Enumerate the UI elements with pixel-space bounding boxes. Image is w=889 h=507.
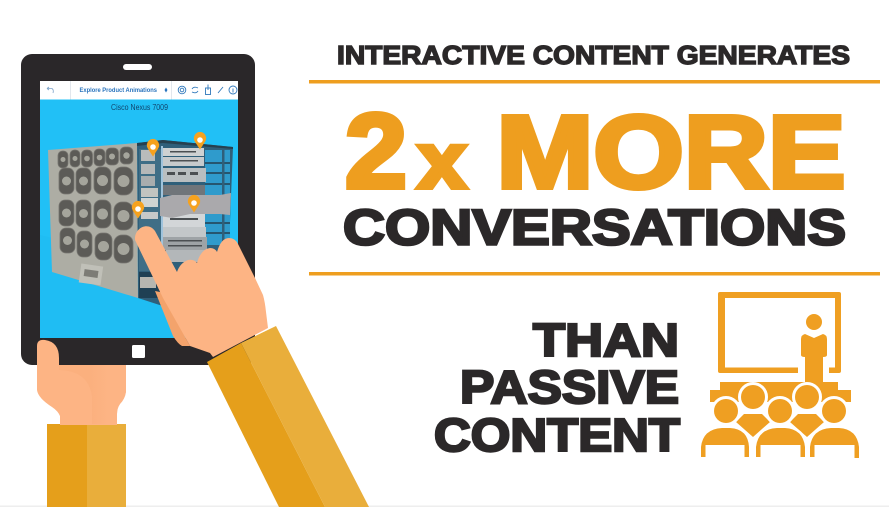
icon: presenter and audience	[701, 292, 859, 458]
toolbar	[40, 81, 238, 100]
speaker slot	[123, 64, 152, 70]
toolbar title: Explore Product Animations	[80, 87, 157, 94]
tablet	[21, 54, 255, 365]
toolbar icons	[178, 84, 237, 94]
headline: 2x more: x	[418, 116, 466, 204]
audience back row stage	[710, 382, 851, 402]
left sleeve	[47, 424, 126, 507]
text: than passive content: CONTENT	[434, 409, 680, 461]
text: than passive content: THAN	[533, 314, 679, 366]
rear panel plate	[79, 264, 103, 285]
server fans	[58, 147, 133, 263]
home button	[132, 345, 145, 358]
screen title: Cisco Nexus 7009	[111, 103, 168, 112]
card slot details	[167, 151, 202, 246]
headline: conversations: CONVERSATIONS	[343, 200, 846, 256]
headline: 2x more: 2	[345, 92, 407, 210]
text: than passive content	[434, 314, 680, 461]
illustration: hands holding tablet	[21, 54, 369, 507]
rack side shelves	[205, 149, 230, 245]
headline: 2x more	[345, 92, 846, 210]
right hand	[135, 226, 268, 357]
line cards	[139, 146, 231, 298]
server photo	[48, 140, 233, 310]
heading: interactive content generates: INTERACTIVE CONTENT GENERATES	[337, 40, 850, 70]
presentation board	[718, 292, 841, 373]
headline: 2x more: MORE	[496, 94, 846, 210]
text: than passive content: PASSIVE	[460, 361, 679, 413]
screen	[40, 81, 238, 338]
back arrow icon	[47, 87, 53, 93]
dropdown marker	[164, 88, 168, 92]
right sleeve	[207, 326, 369, 507]
presenter	[801, 314, 827, 384]
audience front row shoulders	[701, 428, 859, 458]
left hand	[37, 340, 126, 425]
fan hubs	[60, 152, 130, 255]
map pins	[132, 132, 206, 218]
audience	[714, 385, 846, 437]
